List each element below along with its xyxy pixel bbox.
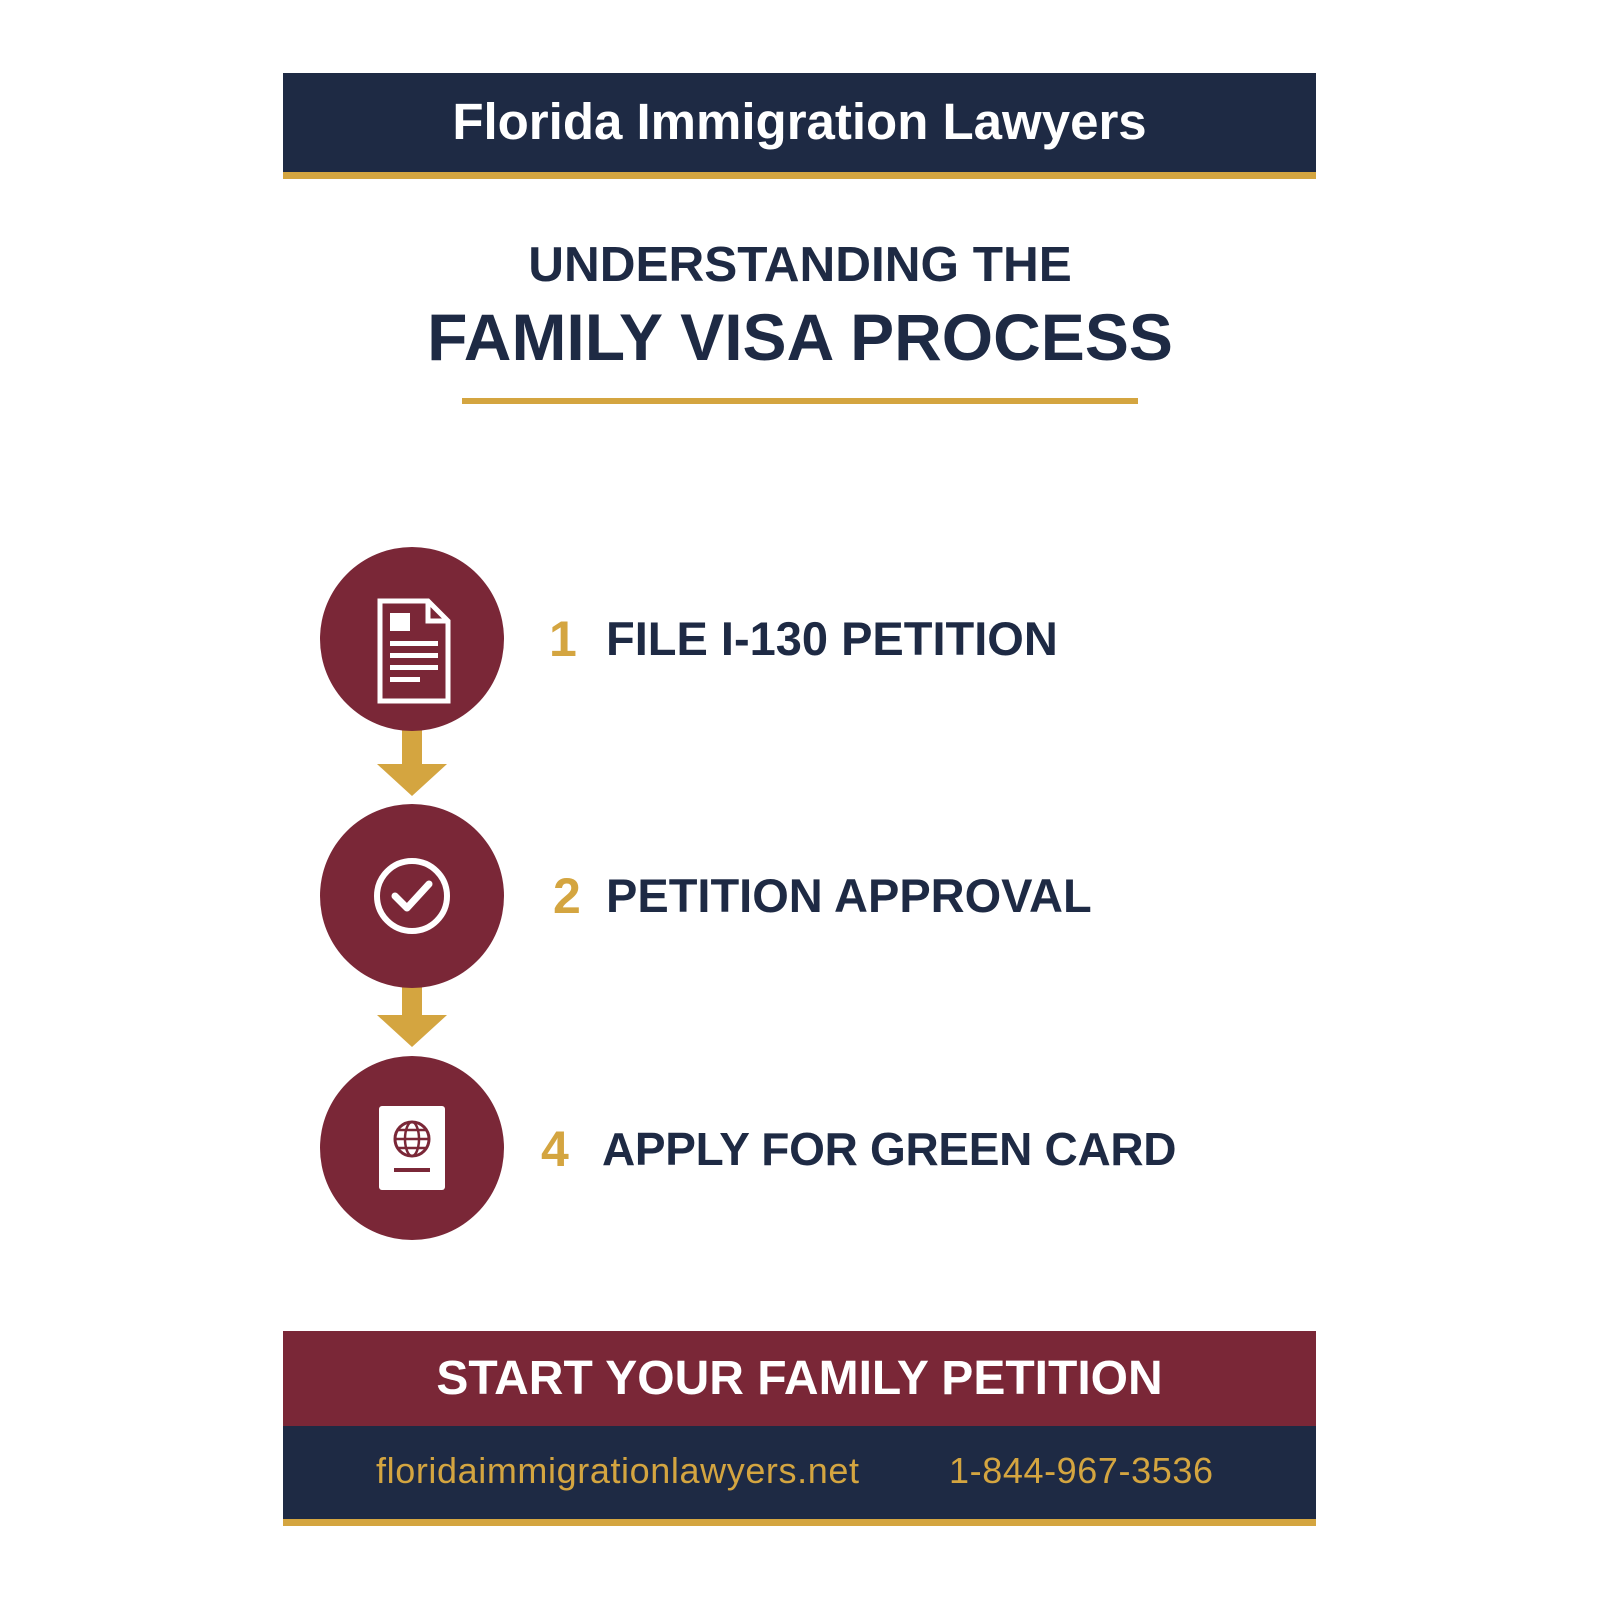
icon: check circle — [320, 804, 504, 988]
step 2: PETITION APPROVAL — [606, 869, 1092, 922]
icon: document circle — [320, 547, 504, 731]
arrow 2 — [377, 987, 447, 1047]
arrow 1 — [377, 730, 447, 796]
footer contact bar — [283, 1426, 1316, 1526]
title underline — [462, 398, 1138, 404]
step 1 number: 1 — [549, 611, 577, 667]
step 4: APPLY FOR GREEN CARD — [602, 1123, 1176, 1175]
CTA banner: START YOUR FAMILY PETITION — [436, 1352, 1163, 1405]
step 4 number: 4 — [541, 1121, 569, 1177]
CTA banner — [283, 1331, 1316, 1426]
header bar — [283, 73, 1316, 179]
main title: FAMILY VISA PROCESS — [427, 300, 1173, 374]
step 2 number: 2 — [553, 868, 581, 924]
step 1: FILE I-130 PETITION — [606, 612, 1058, 665]
header title: Florida Immigration Lawyers — [452, 93, 1147, 150]
main title: UNDERSTANDING THE — [528, 237, 1072, 292]
main title — [427, 237, 1173, 374]
icon: passport circle — [320, 1056, 504, 1240]
website: floridaimmigrationlawyers.net — [376, 1450, 860, 1491]
phone: 1-844-967-3536 — [949, 1450, 1214, 1491]
